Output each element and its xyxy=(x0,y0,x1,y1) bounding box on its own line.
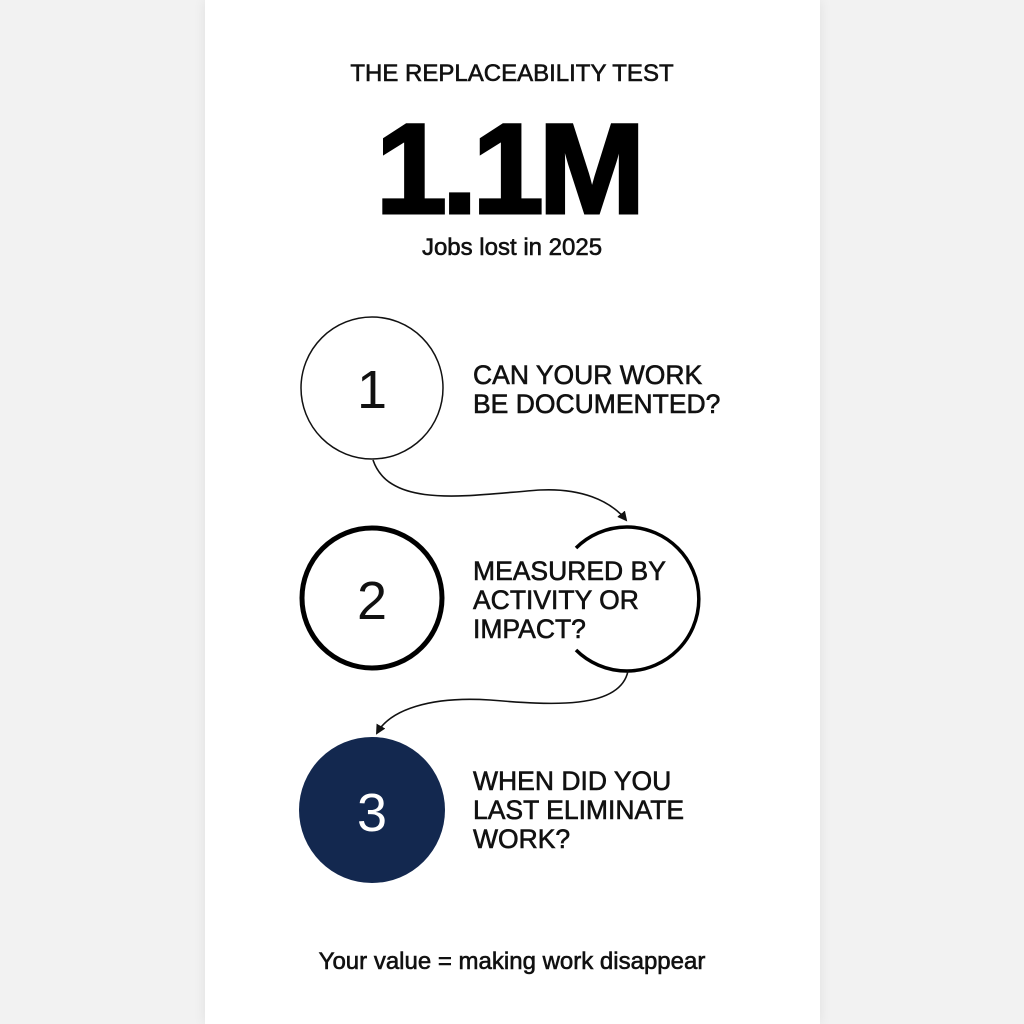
step 2 xyxy=(302,527,699,671)
step 1: 1 xyxy=(357,360,387,420)
step 3: WHEN DID YOU xyxy=(473,766,671,796)
step 3: 3 xyxy=(357,783,387,843)
footer text: Your value = making work disappear xyxy=(319,948,705,975)
step 3 xyxy=(299,737,684,883)
step 1: BE DOCUMENTED? xyxy=(473,389,720,419)
arrow 1 to 2 xyxy=(373,460,626,520)
step 2: IMPACT? xyxy=(473,614,586,644)
step 2: ACTIVITY OR xyxy=(473,585,639,615)
big number: 1.1M xyxy=(376,98,640,241)
arrow 2 to 3 xyxy=(377,671,628,733)
step 2: 2 xyxy=(357,571,387,631)
step 3: LAST ELIMINATE xyxy=(473,795,684,825)
step 1 xyxy=(301,317,720,459)
panel: card xyxy=(205,0,820,1024)
step 2: MEASURED BY xyxy=(473,556,666,586)
step 1: CAN YOUR WORK xyxy=(473,360,703,390)
title: THE REPLACEABILITY TEST xyxy=(350,60,674,87)
subtitle: Jobs lost in 2025 xyxy=(422,234,602,261)
step 3: WORK? xyxy=(473,824,570,854)
